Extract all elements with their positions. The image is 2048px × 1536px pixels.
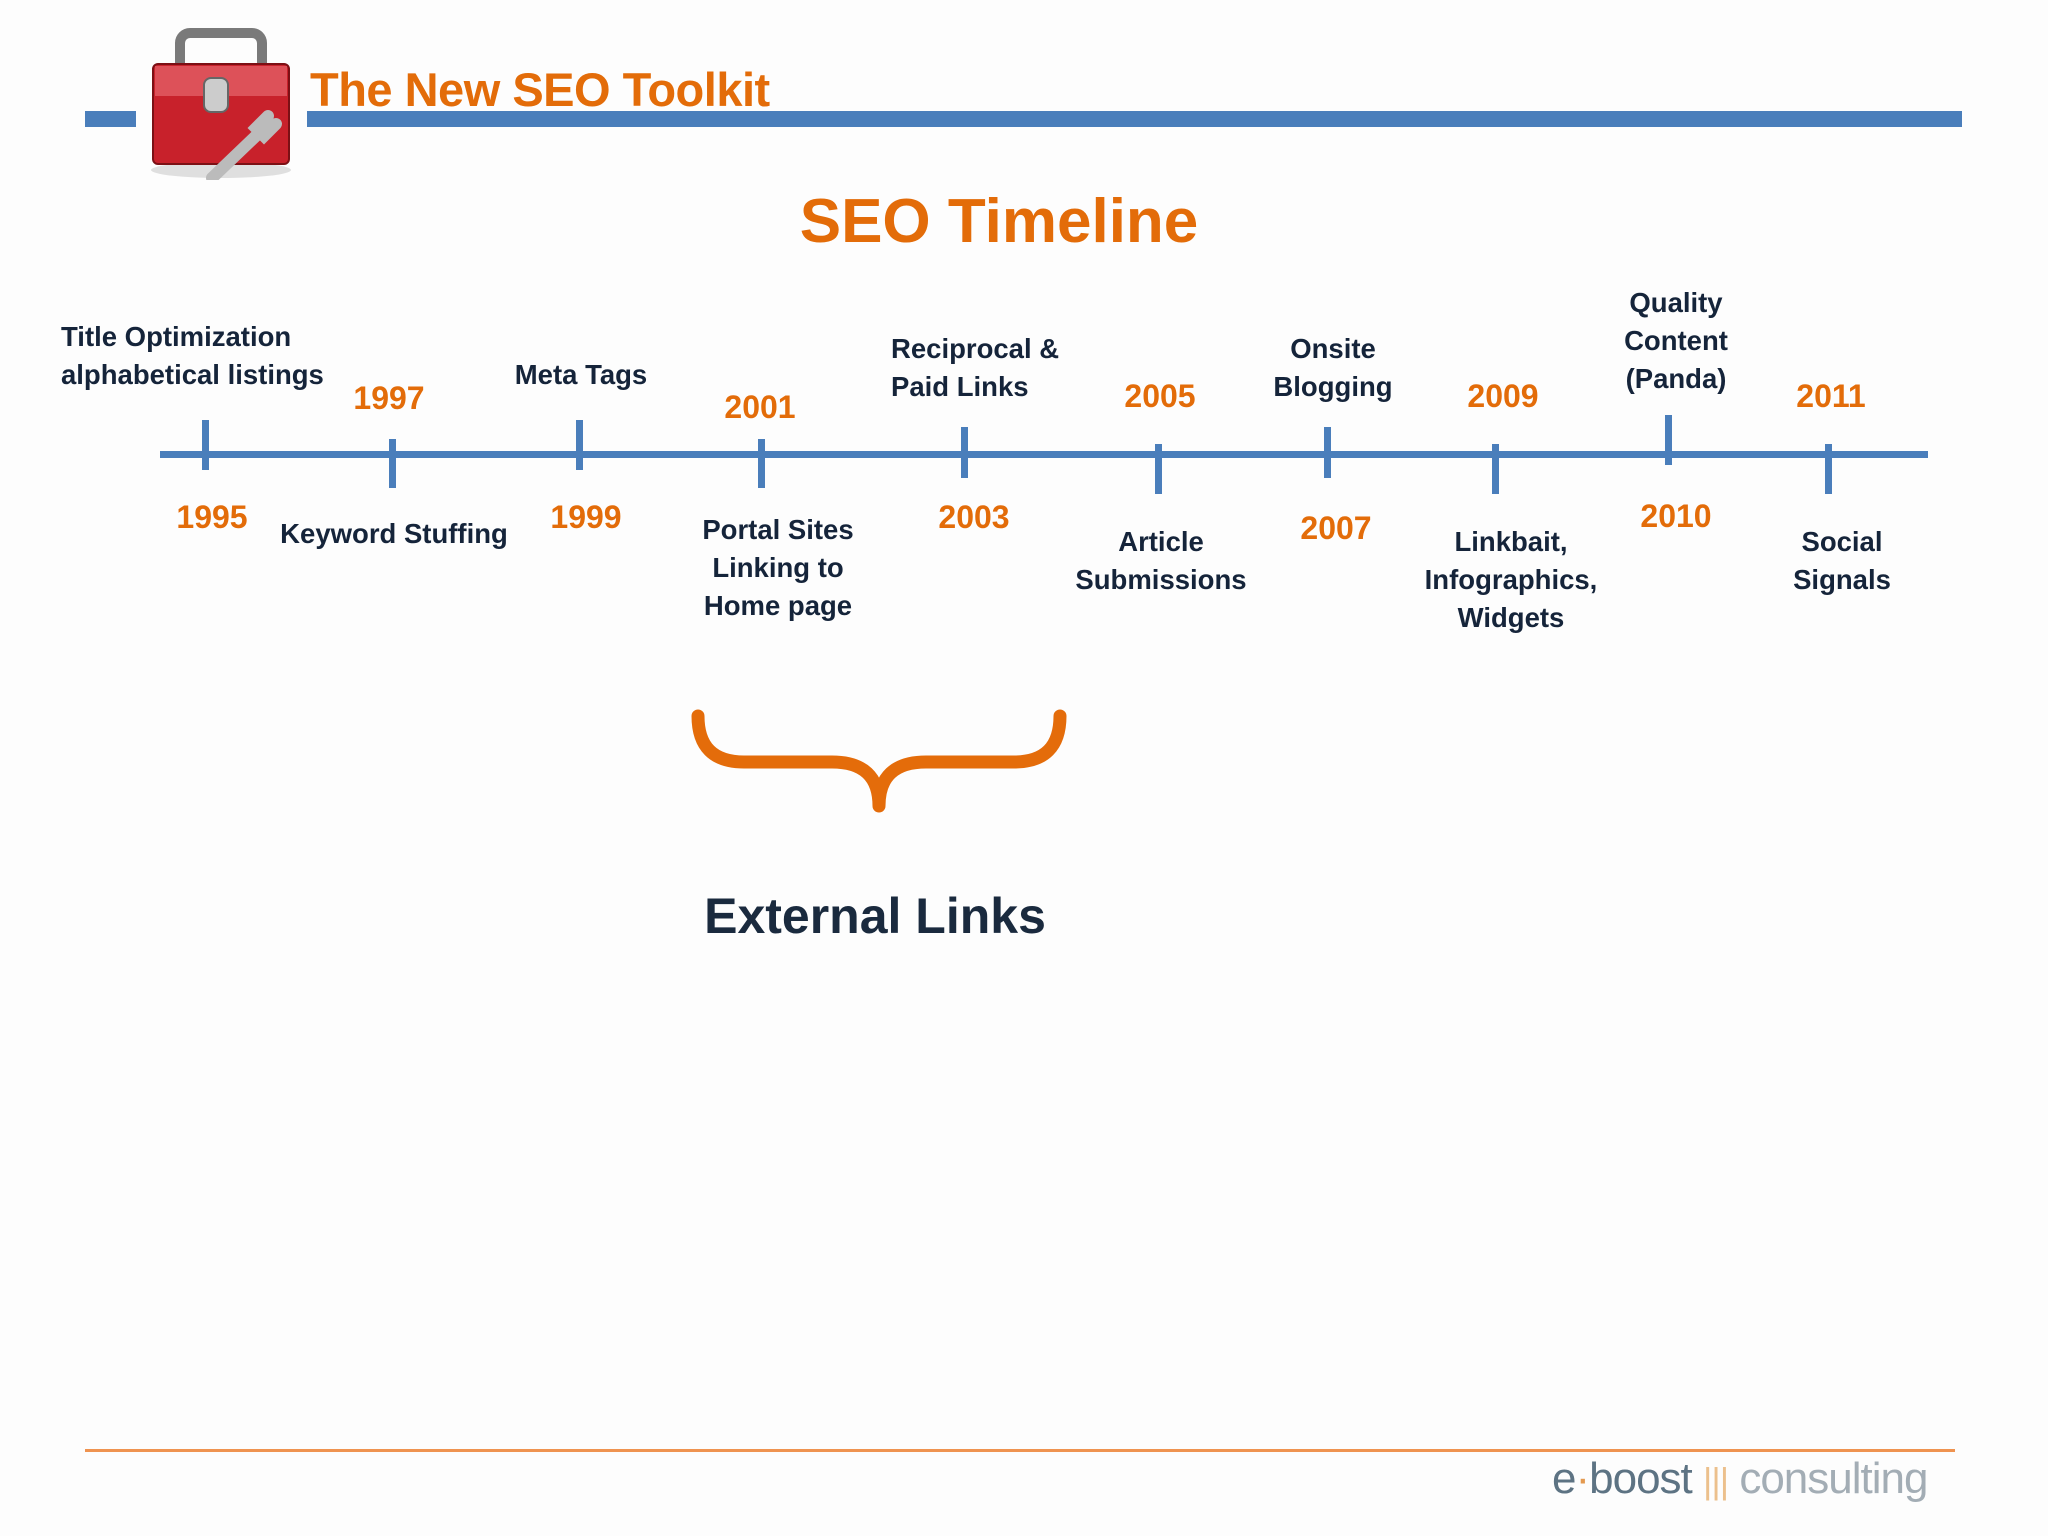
footer line (85, 1449, 1955, 1452)
timeline: 2001 (724, 389, 796, 425)
timeline: 2009 (1467, 378, 1539, 414)
timeline: Linkbait, (1454, 526, 1568, 557)
timeline: Infographics, (1425, 564, 1597, 595)
timeline: Paid Links (891, 371, 1029, 402)
timeline: (Panda) (1626, 363, 1726, 394)
header bar left (85, 111, 136, 127)
timeline: Blogging (1273, 371, 1393, 402)
timeline: Portal Sites (702, 514, 854, 545)
timeline: 1997 (353, 380, 425, 416)
timeline: Content (1624, 325, 1728, 356)
timeline: Submissions (1075, 564, 1247, 595)
labels: alphabetical listings (61, 359, 324, 390)
timeline: 2005 (1124, 378, 1196, 414)
timeline: Meta Tags (515, 359, 647, 390)
timeline: Quality (1629, 287, 1723, 318)
logo: e·boost ||| consulting (1552, 1454, 1927, 1503)
timeline: 2011 (1796, 378, 1866, 414)
years: 1995 (176, 499, 248, 535)
labels (61, 321, 324, 390)
timeline: Reciprocal & (891, 333, 1059, 364)
timeline: Keyword Stuffing (280, 518, 508, 549)
header bar right (307, 111, 1962, 127)
timeline (61, 287, 1928, 633)
timeline: Linking to (712, 552, 844, 583)
timeline: Social (1801, 526, 1882, 557)
timeline: 2003 (938, 499, 1010, 535)
main title: SEO Timeline (800, 187, 1198, 256)
External Links label: External Links (704, 888, 1046, 944)
brace (692, 710, 1066, 812)
timeline: Signals (1793, 564, 1891, 595)
timeline: Article (1118, 526, 1204, 557)
timeline: Widgets (1458, 602, 1564, 633)
icon: toolbox (151, 28, 291, 180)
timeline: Home page (704, 590, 852, 621)
timeline: 1999 (550, 499, 622, 535)
timeline: 2007 (1300, 510, 1372, 546)
timeline: Onsite (1290, 333, 1376, 364)
timeline: 2010 (1640, 498, 1712, 534)
labels: Title Optimization (61, 321, 291, 352)
header title: The New SEO Toolkit (310, 63, 770, 116)
